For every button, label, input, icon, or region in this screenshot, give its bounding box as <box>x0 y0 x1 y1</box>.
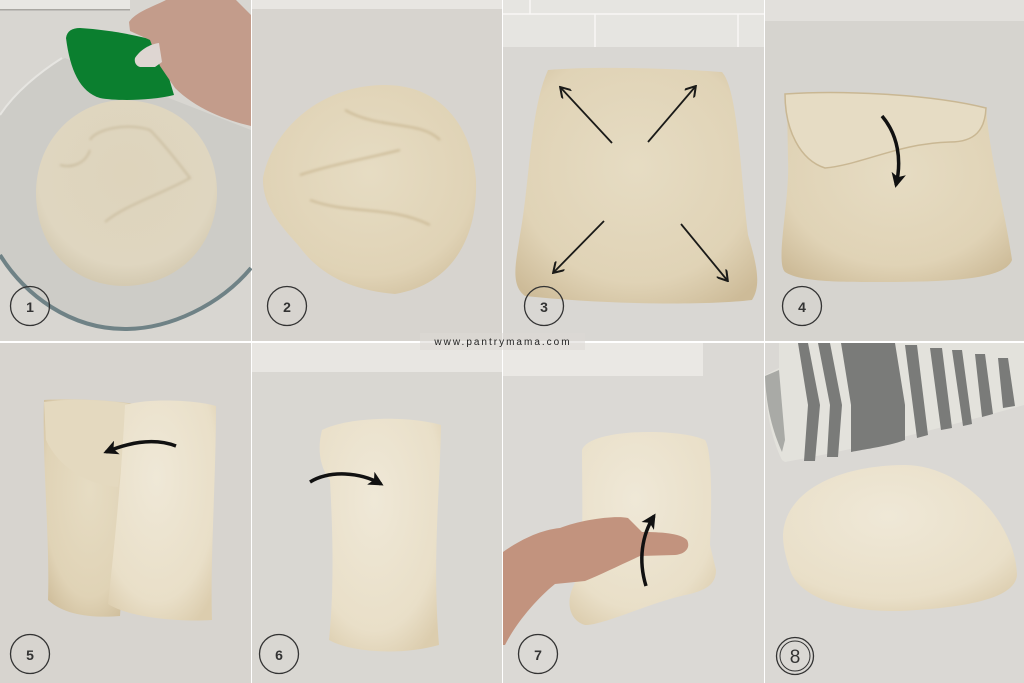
website credit: www.pantrymama.com <box>433 337 572 348</box>
step number 6 <box>260 634 298 674</box>
striped towel <box>765 343 1024 462</box>
inner flap <box>44 400 130 487</box>
step number 6: 6 <box>275 647 283 663</box>
arrow <box>310 474 381 484</box>
hand and arm <box>503 517 688 645</box>
step number 3 <box>524 286 564 326</box>
panel 8: finished dough with towel <box>765 343 1024 683</box>
step number 5: 5 <box>26 647 34 663</box>
green scraper <box>66 28 174 100</box>
step number 2: 2 <box>283 299 291 315</box>
dough <box>782 95 1012 282</box>
step number 5 <box>10 634 50 674</box>
step number 1: 1 <box>26 299 34 315</box>
step number 4 <box>782 286 822 326</box>
arrow <box>106 442 176 452</box>
arrows <box>554 87 727 280</box>
dough round <box>263 85 476 294</box>
step number 2 <box>268 286 306 326</box>
step number 7 <box>518 634 558 674</box>
panel 7: rolling dough by hand <box>503 343 764 683</box>
dough <box>320 419 441 651</box>
dough <box>569 432 716 625</box>
step number 1 <box>10 286 50 326</box>
step number 8: 8 <box>790 647 800 668</box>
dough fold <box>108 401 216 620</box>
panel 6: left side fold <box>252 343 502 683</box>
panel 2: flattened dough <box>252 0 502 341</box>
arrow <box>642 516 654 586</box>
panel 5: right side fold <box>0 343 251 683</box>
panel 1: dough in bowl <box>0 0 251 341</box>
glass bowl <box>0 58 251 329</box>
shaped dough <box>783 465 1017 611</box>
step number 8 <box>776 638 814 674</box>
dough ball <box>36 100 217 286</box>
website credit <box>420 333 585 350</box>
dough rectangle <box>515 68 757 303</box>
fold flap <box>785 93 986 168</box>
panel 3: stretched rectangle with arrows <box>503 0 764 341</box>
fingernail <box>135 43 162 67</box>
step number 3: 3 <box>540 299 548 315</box>
arrow <box>882 116 899 185</box>
hand <box>129 0 251 126</box>
step number 7: 7 <box>534 647 542 663</box>
panel 4: top fold down <box>765 0 1024 341</box>
dough lower layer <box>44 399 135 617</box>
step number 4: 4 <box>798 299 806 315</box>
